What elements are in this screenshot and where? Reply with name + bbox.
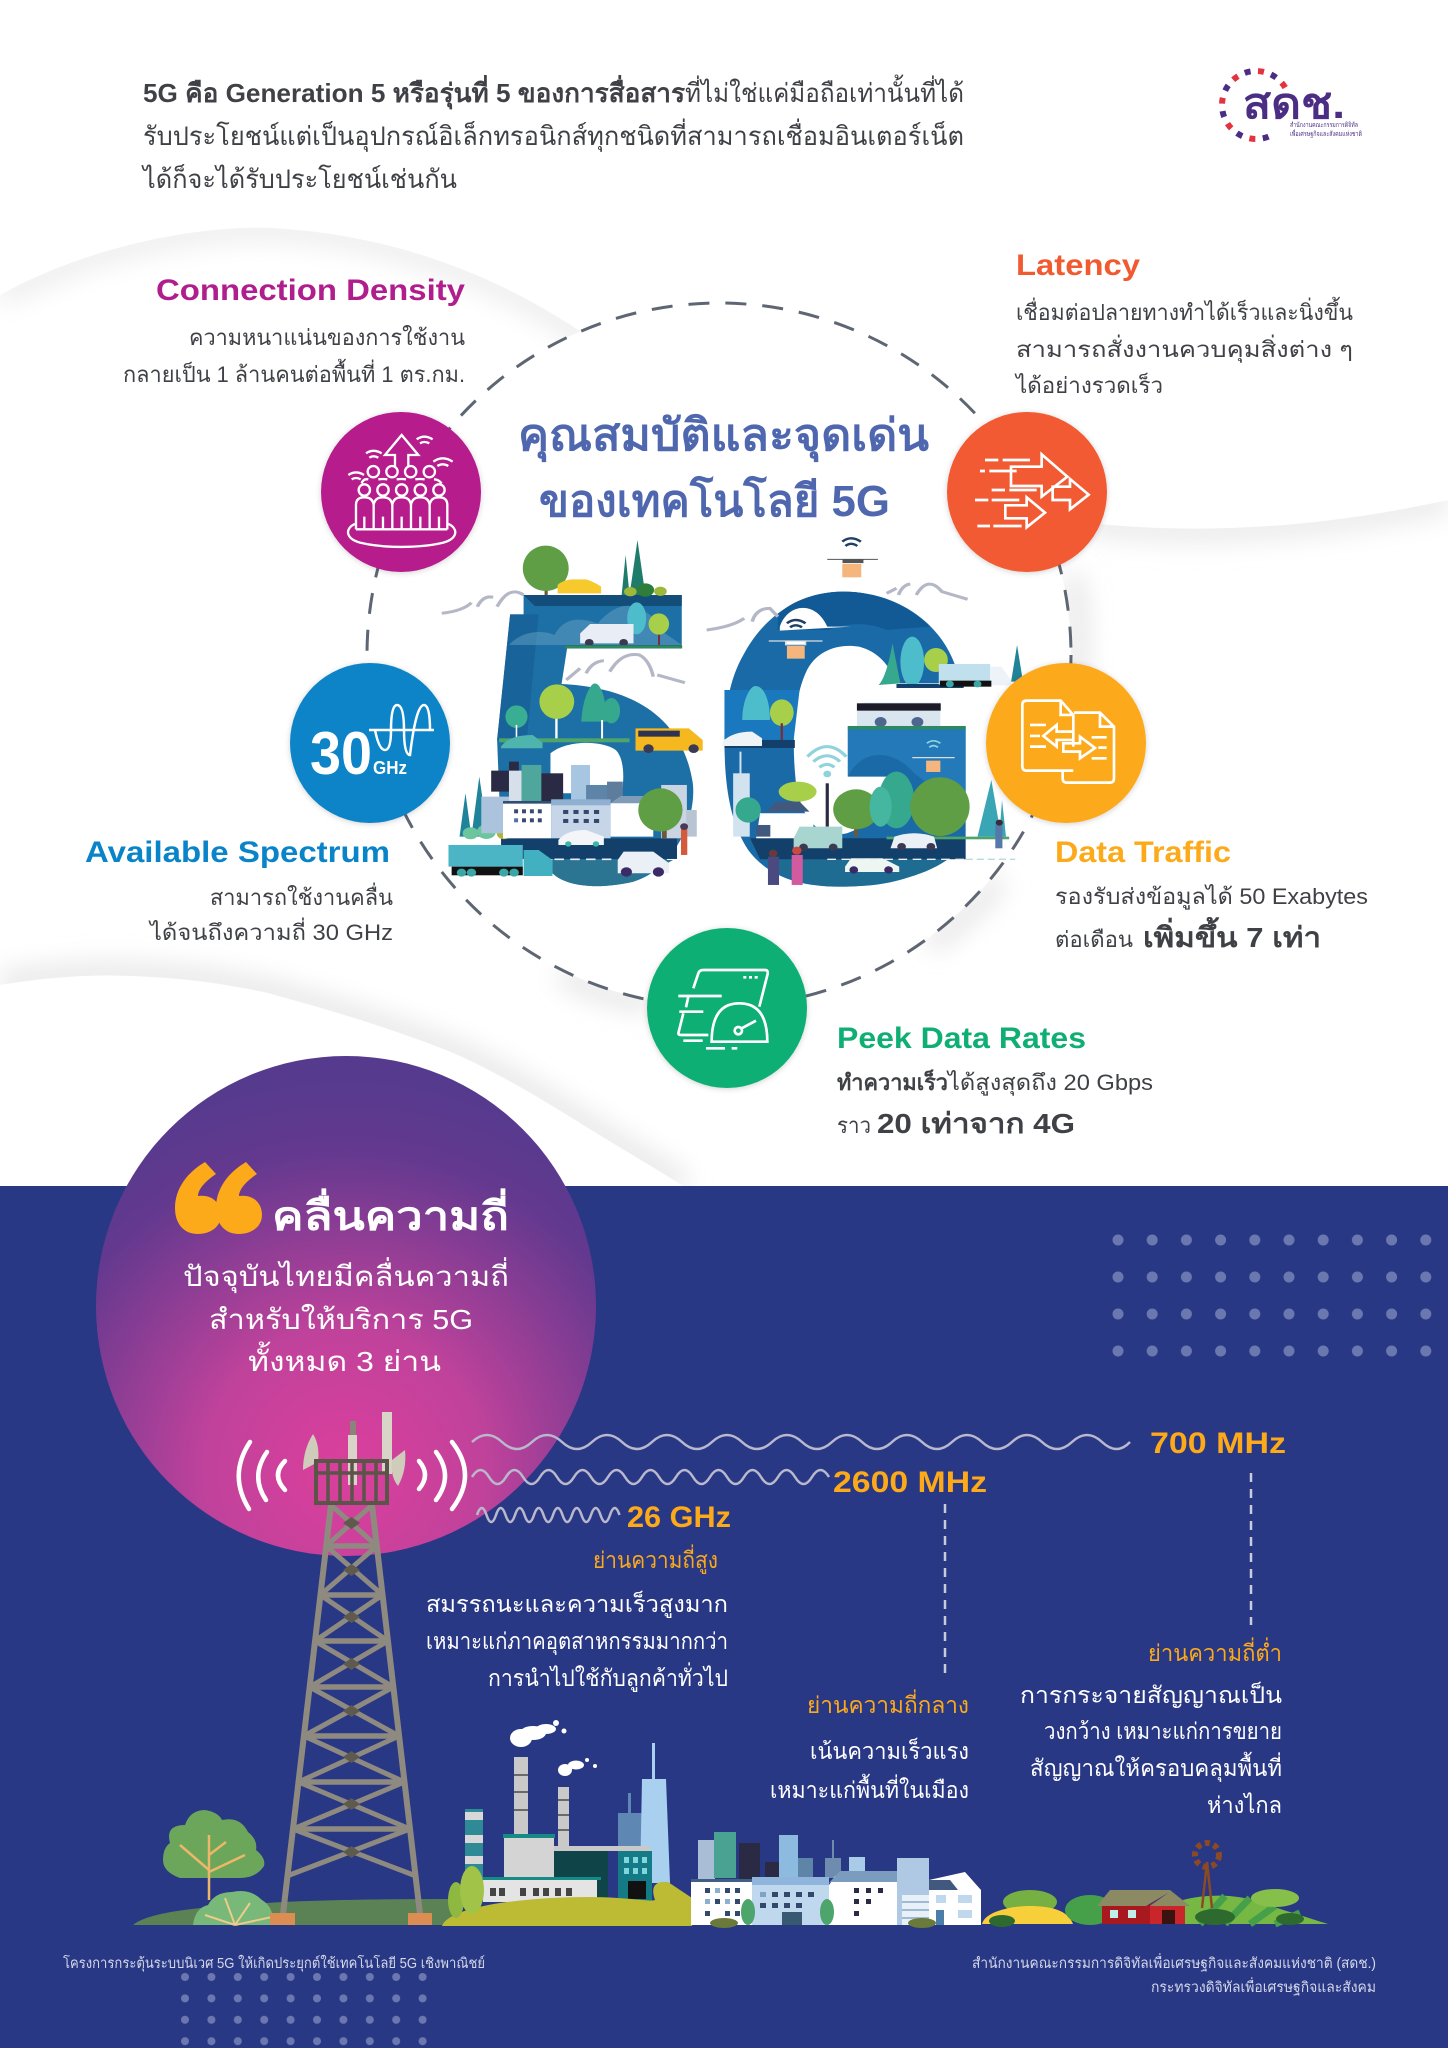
label: 26 GHz: 26 GHz <box>627 1501 731 1534</box>
road 5 <box>501 838 677 859</box>
dot pattern top right <box>1112 1234 1436 1360</box>
landscape: city <box>691 1832 981 1928</box>
heading: Data Traffic: Data Traffic <box>1055 836 1231 869</box>
icon: data traffic <box>986 663 1146 823</box>
text: mid band <box>770 1689 969 1803</box>
text: Peek Data Rates: ทำความเร็ว <box>837 1068 948 1095</box>
text: low band: ย่านความถี่ต่ำ <box>1148 1637 1282 1666</box>
clouds <box>442 584 968 683</box>
text: Latency: สามารถสั่งงานควบคุมสิ่งต่าง ๆ <box>1016 334 1353 363</box>
wave: 2600 MHz <box>472 1470 829 1484</box>
purple spotlight circle <box>96 1056 596 1556</box>
icon: connection density <box>321 412 481 572</box>
text: mid band: เน้นความเร็วแรง <box>810 1736 969 1764</box>
numeral G <box>724 592 966 887</box>
text: mid band: ย่านความถี่กลาง <box>807 1689 969 1718</box>
text: frequency summary <box>183 1257 509 1377</box>
text: Latency: เชื่อมต่อปลายทางทำได้เร็วและนิ่งขึ้น <box>1016 297 1353 325</box>
text: low band: ห่างไกล <box>1207 1792 1282 1818</box>
text: frequency summary: สำหรับให้บริการ 5G <box>209 1303 473 1335</box>
antennas <box>303 1412 405 1486</box>
icon: latency <box>947 412 1107 572</box>
text: high band: เหมาะแก่ภาคอุตสาหกรรมมากกว่า <box>426 1628 728 1655</box>
label: 700 MHz: 700 MHz <box>1150 1427 1286 1460</box>
text: frequency summary: ทั้งหมด 3 ย่าน <box>248 1341 441 1377</box>
heading: Available Spectrum: Available Spectrum <box>85 836 390 869</box>
text: Peek Data Rates <box>837 1068 1153 1139</box>
navy section background <box>0 1186 1448 2048</box>
text: Connection Density: ความหนาแน่นของการใช้งาน <box>189 325 465 350</box>
intro text: ที่ไม่ใช่แค่มือถือเท่านั้นที่ได้ <box>685 74 964 108</box>
text: low band <box>1020 1637 1282 1818</box>
text: high band: การนำไปใช้กับลูกค้าทั่วไป <box>488 1662 728 1692</box>
landscape: factory <box>442 1720 692 1926</box>
text: Data Traffic <box>1055 884 1368 953</box>
footer right <box>972 1953 1376 1996</box>
label: 2600 MHz: 2600 MHz <box>833 1466 987 1499</box>
text: Data Traffic: เพิ่มขึ้น 7 เท่า <box>1143 916 1321 953</box>
signal arcs <box>239 1442 465 1509</box>
logo: เพื่อเศรษฐกิจและสังคมแห่งชาติ <box>1290 129 1362 138</box>
icon: quote mark <box>175 1162 262 1234</box>
5G city illustration <box>442 538 1023 887</box>
dot pattern bottom <box>180 1972 430 2048</box>
vehicles on 5 <box>501 579 703 753</box>
background wave: bottom left <box>0 975 683 1186</box>
footer right: กระทรวงดิจิทัลเพื่อเศรษฐกิจและสังคม <box>1151 1977 1376 1996</box>
text: Latency: ได้อย่างรวดเร็ว <box>1014 371 1163 398</box>
text: low band: สัญญาณให้ครอบคลุมพื้นที่ <box>1030 1752 1282 1782</box>
wave: 700 MHz <box>472 1435 1130 1449</box>
icon: available spectrum 30 GHz: GHz <box>373 758 407 778</box>
intro text: ได้ก็จะได้รับประโยชน์เช่นกัน <box>141 163 457 194</box>
wave: 26 GHz <box>477 1508 620 1522</box>
icon: available spectrum 30 GHz: 30 <box>310 720 372 787</box>
title: ของเทคโนโลยี 5G <box>539 474 890 526</box>
text: Peek Data Rates: ราว <box>837 1113 871 1138</box>
dashed ring <box>367 303 1071 1007</box>
landscape: ground and trees left <box>133 1810 452 1925</box>
footer left: โครงการกระตุ้นระบบนิเวศ 5G ให้เกิดประยุกต์ใช้เทคโนโลยี 5G เชิงพาณิชย์ <box>63 1954 485 1972</box>
icon: peak data rates <box>647 928 807 1088</box>
intro text: 5G คือ Generation 5 หรือรุ่นที่ 5 ของการสื่อสาร <box>143 74 685 110</box>
text: Peek Data Rates: ได้สูงสุดถึง 20 Gbps <box>946 1070 1153 1096</box>
heading: Latency: Latency <box>1016 249 1140 282</box>
text: Data Traffic: รองรับส่งข้อมูลได้ 50 Exabytes <box>1055 884 1368 910</box>
background wave: top left <box>6 228 580 338</box>
text: low band: วงกว้าง เหมาะแก่การขยาย <box>1044 1718 1282 1744</box>
text: low band: การกระจายสัญญาณเป็น <box>1020 1680 1282 1708</box>
text: Peek Data Rates: 20 เท่าจาก 4G <box>877 1108 1075 1139</box>
icon: available spectrum 30 GHz <box>290 663 450 823</box>
text: Available Spectrum: ได้จนถึงความถี่ 30 GHz <box>148 917 393 945</box>
intro text <box>141 74 964 194</box>
G scenery <box>722 637 1023 885</box>
heading: Connection Density: Connection Density <box>156 274 465 307</box>
text: mid band: เหมาะแก่พื้นที่ในเมือง <box>770 1774 969 1803</box>
title <box>518 411 929 526</box>
footer right: สำนักงานคณะกรรมการดิจิทัลเพื่อเศรษฐกิจและสังคมแห่งชาติ (สดช.) <box>972 1953 1376 1972</box>
landscape: farm <box>982 1843 1328 1927</box>
radio tower <box>270 1412 432 1925</box>
text: Connection Density: กลายเป็น 1 ล้านคนต่อพื้นที่ 1 ตร.กม. <box>123 359 465 387</box>
text: Connection Density <box>123 325 465 387</box>
platform <box>316 1461 387 1503</box>
logo: สดช. <box>1243 80 1345 127</box>
ring shadow <box>560 575 1079 1004</box>
white clouds on numerals <box>780 608 851 631</box>
text: high band: ย่านความถี่สูง <box>593 1544 718 1574</box>
background wave: right <box>1090 500 1448 529</box>
drones and wifi <box>769 538 955 827</box>
intro text: รับประโยชน์แต่เป็นอุปกรณ์อิเล็กทรอนิกส์ทุกชนิดที่สามารถเชื่อมอินเตอร์เน็ต <box>143 118 964 152</box>
heading: frequency: คลื่นความถี่ <box>272 1188 509 1239</box>
city block on 5 <box>448 762 697 877</box>
trees on 5 <box>499 540 669 742</box>
heading: Peek Data Rates: Peek Data Rates <box>837 1022 1086 1055</box>
dashed connector 2600 MHz <box>944 1504 946 1678</box>
text: Available Spectrum <box>148 882 393 945</box>
logo <box>1222 71 1362 140</box>
text: Data Traffic: ต่อเดือน <box>1055 927 1133 952</box>
text: Latency <box>1014 297 1353 398</box>
text: frequency summary: ปัจจุบันไทยมีคลื่นความถี่ <box>183 1257 509 1294</box>
title: คุณสมบัติและจุดเด่น <box>518 411 929 463</box>
logo: สำนักงานคณะกรรมการดิจิทัล <box>1290 121 1358 129</box>
text: high band <box>426 1544 728 1692</box>
text: high band: สมรรถนะและความเร็วสูงมาก <box>426 1589 728 1618</box>
numeral 5 <box>497 595 693 886</box>
text: Available Spectrum: สามารถใช้งานคลื่น <box>210 882 393 910</box>
dashed connector 700 MHz <box>1250 1473 1252 1625</box>
